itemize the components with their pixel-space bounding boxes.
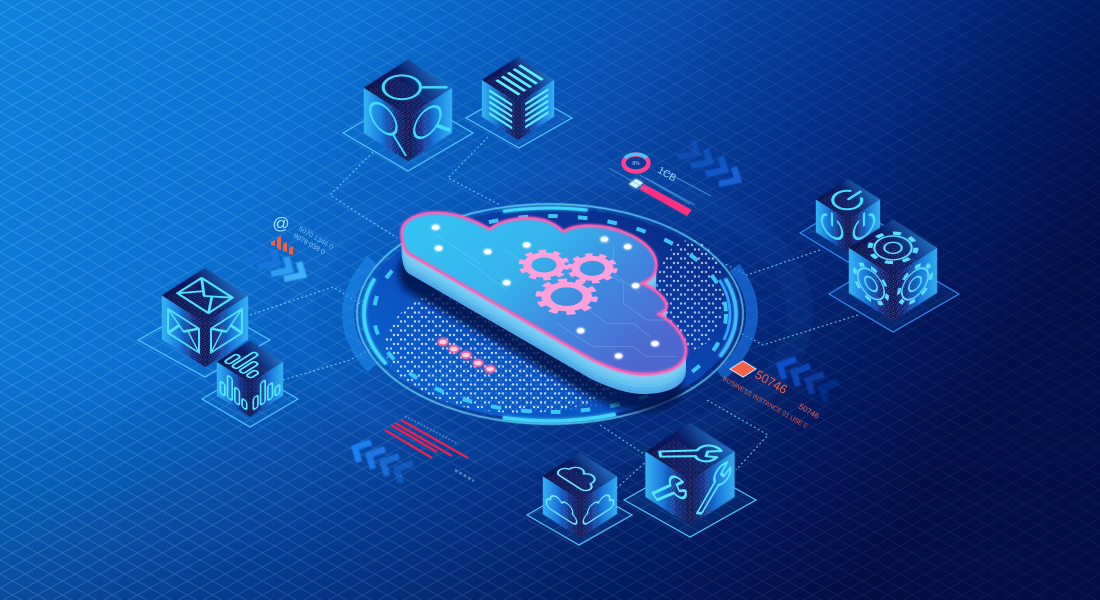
faint outer halo ring: [300, 172, 800, 456]
cloud glowing outline: [402, 213, 686, 374]
status square: [629, 179, 643, 188]
cloud extruded side: [402, 216, 686, 394]
at sign: @: [272, 214, 290, 233]
chevrons: right: [780, 359, 838, 402]
cube: documents: [482, 57, 554, 140]
red diamond: [730, 361, 756, 377]
orange bars: [271, 236, 293, 255]
gear icon: large lower: [539, 280, 595, 313]
caption: BUSINESS INSTANCE 01 USE 0: [721, 376, 809, 430]
row of pink indicator lights: [438, 339, 494, 372]
cube: gears: [849, 220, 937, 321]
chevrons: bottom left: [355, 442, 413, 483]
platform rings: [348, 200, 752, 428]
donut gauge: [624, 154, 648, 172]
gear icon: upper left: [521, 251, 567, 279]
platform disc: [363, 208, 737, 420]
platform diamonds under cubes: [138, 88, 959, 545]
value label: 1CB: [656, 165, 678, 184]
cloud top face: [402, 213, 686, 374]
gear icon: upper right: [570, 255, 615, 282]
central cloud with gears: [402, 213, 686, 394]
cube: wrenches: [646, 423, 734, 525]
circuit traces: [433, 233, 677, 357]
small figure: 50746: [797, 402, 821, 421]
white glowing lights: [432, 225, 659, 358]
data widget: email stats: [271, 214, 334, 256]
figure label: 50746: [752, 367, 790, 397]
cloud shadow: [398, 249, 683, 411]
red chart lines: bottom left: [385, 416, 474, 481]
cube: magnifying glasses: [364, 60, 452, 161]
data widget: email stats: 8078 038 0: [292, 233, 326, 256]
data widget: red figures: [721, 361, 821, 430]
chevrons: left: [244, 244, 303, 279]
central circular platform: [348, 200, 752, 428]
cube: mail: [162, 268, 248, 367]
cube: clouds: [543, 453, 617, 538]
fine data lines: [609, 168, 711, 205]
data widget: top right donut and bar: [609, 154, 711, 216]
cube: power buttons: [816, 179, 880, 253]
pink status bar: [639, 184, 692, 216]
platform dot matrix: [385, 277, 655, 413]
chevrons: top right: [678, 140, 738, 184]
small caption text: 5070 1346 0: [297, 226, 334, 251]
cube: bar charts: [217, 341, 283, 417]
data widget: top right donut and bar: 8%: [632, 161, 640, 167]
dotted connector lines: [250, 137, 858, 488]
